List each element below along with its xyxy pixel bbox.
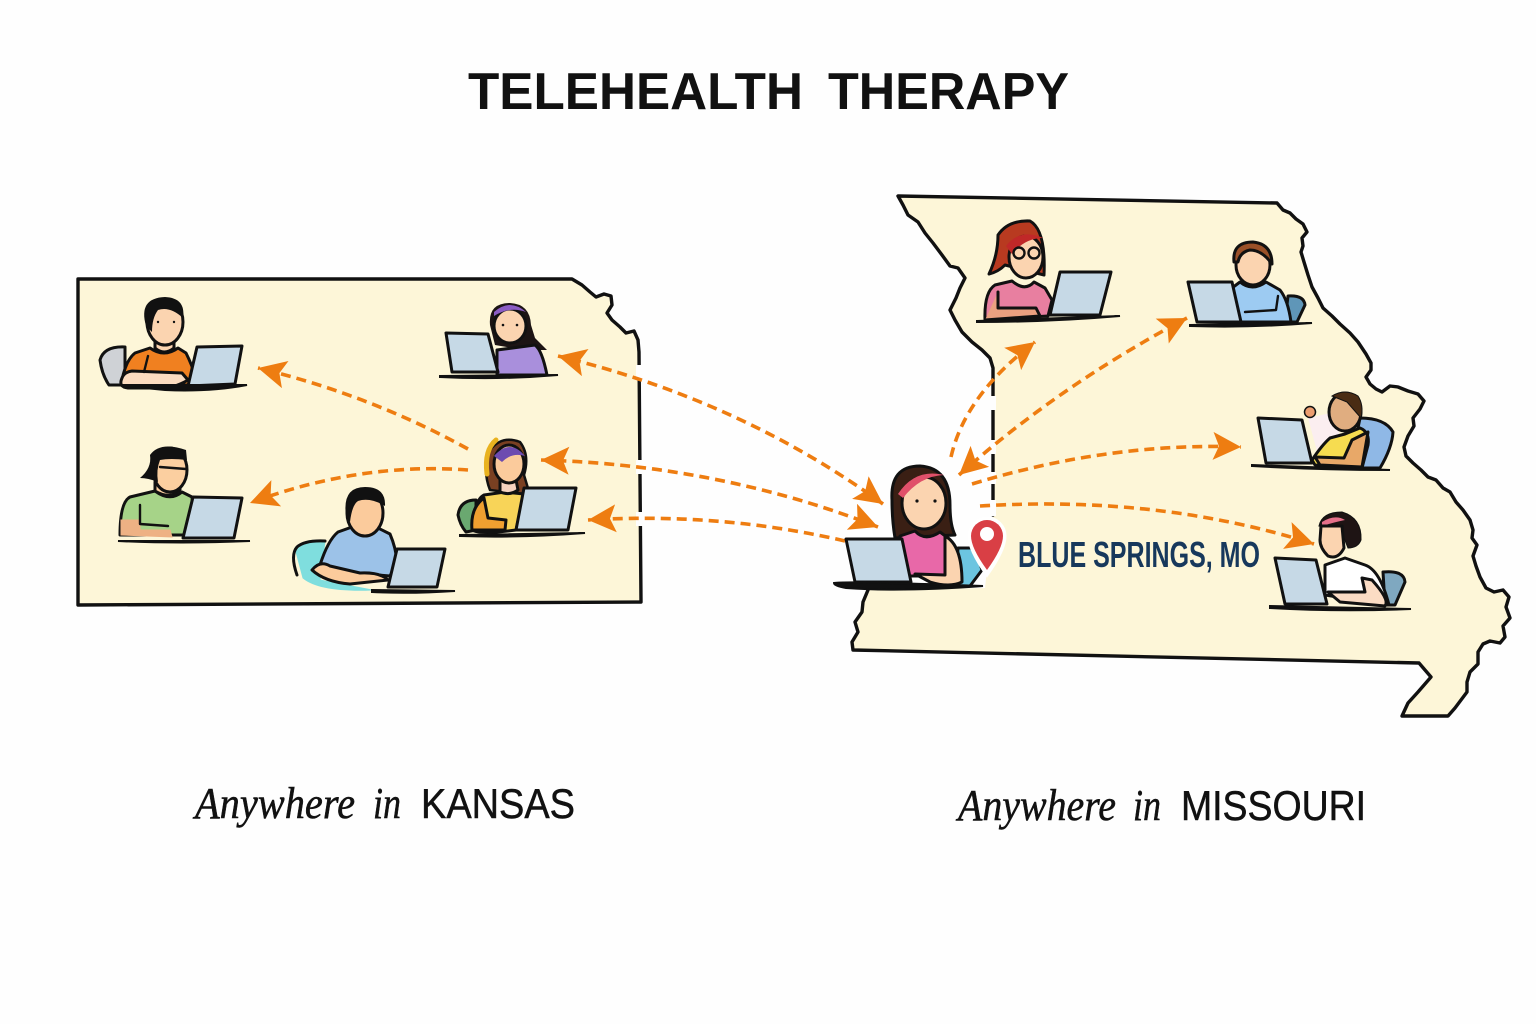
title (468, 63, 1069, 121)
arrow: therapist to Kansas headset client (541, 460, 878, 527)
person: Missouri yellow shirt (1252, 392, 1393, 470)
arrow: therapist to Kansas purple top client (558, 356, 883, 504)
arrow: therapist to Missouri light blue client (959, 318, 1187, 475)
arrow: therapist to Missouri glasses client (951, 342, 1035, 457)
caption: Kansas: Anywhere (192, 779, 355, 828)
title: THERAPY (828, 63, 1069, 121)
arrow: Kansas to green shirt client (250, 469, 468, 503)
location label: BLUE SPRINGS, MO (1018, 534, 1260, 575)
location pin (969, 518, 1005, 575)
person: central therapist (834, 466, 983, 590)
person: Missouri glasses woman (977, 221, 1120, 322)
caption: Kansas (192, 779, 575, 828)
person: Missouri white shirt with headphones (1270, 512, 1411, 610)
map: Missouri (852, 196, 1510, 716)
map: Kansas (78, 279, 641, 605)
caption: Kansas: in (373, 779, 401, 828)
person: Kansas purple top (440, 303, 558, 378)
caption: Missouri: MISSOURI (1181, 782, 1366, 829)
caption: Missouri: in (1133, 781, 1161, 830)
arrow: therapist to Missouri yellow client (972, 446, 1241, 484)
caption: Kansas: KANSAS (421, 780, 575, 827)
person: Kansas headset woman (458, 440, 585, 537)
connection arrows (250, 318, 1314, 544)
person: Missouri light blue shirt (1188, 242, 1312, 327)
person: Kansas green shirt (118, 446, 250, 542)
title: TELEHEALTH (468, 63, 803, 121)
person: Kansas blue shirt (294, 487, 455, 593)
arrow: therapist to Kansas lower client (588, 518, 845, 541)
arrow: therapist to Missouri headphones client (980, 504, 1314, 544)
arrow: Kansas to orange shirt client (258, 368, 468, 449)
caption: Missouri (955, 781, 1366, 830)
map border gaps at arrow crossings (636, 365, 996, 526)
person: Kansas orange shirt (100, 297, 247, 390)
caption: Missouri: Anywhere (955, 781, 1116, 830)
